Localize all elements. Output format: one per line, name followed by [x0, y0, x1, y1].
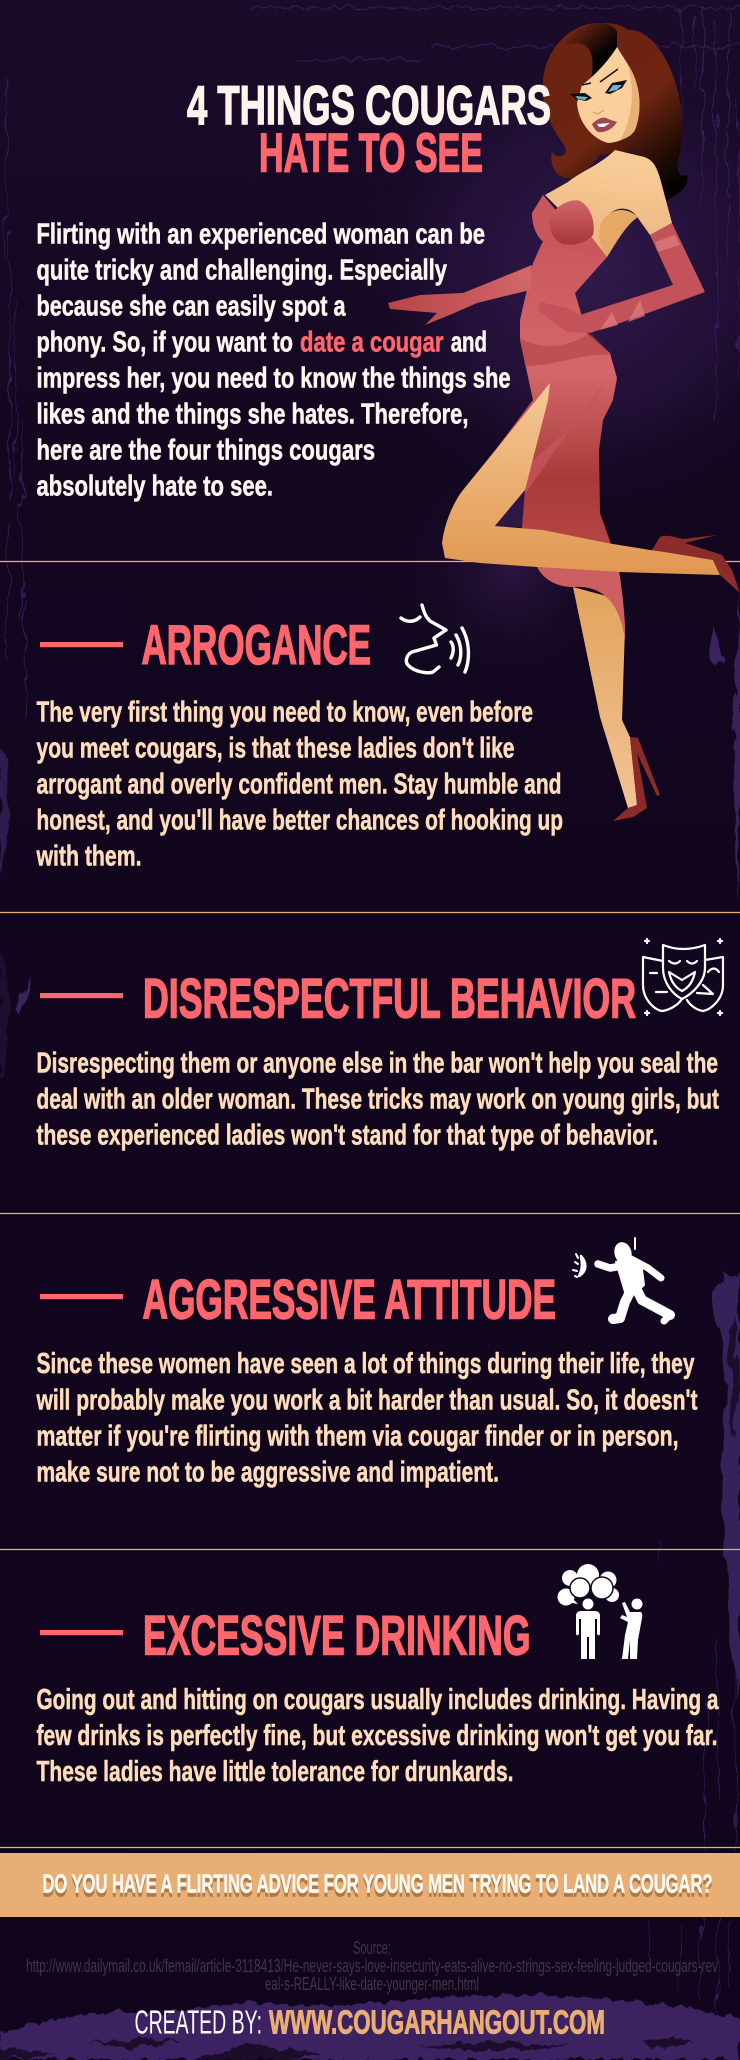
hair	[543, 23, 688, 202]
intro paragraph: date a cougar	[300, 326, 444, 358]
body text	[36, 1684, 719, 1788]
dash	[40, 1630, 123, 1635]
glove folds	[600, 235, 680, 330]
gap between the legs	[495, 490, 525, 527]
body text: The very first thing you need to know, even before	[36, 697, 533, 729]
front leg	[442, 383, 720, 575]
body text: arrogant and overly confident men. Stay humble and	[36, 768, 562, 800]
dress fold shadow	[520, 333, 610, 366]
call-to-action banner	[0, 1853, 740, 1917]
body text: with them.	[36, 840, 142, 872]
source	[26, 1938, 718, 1994]
intro paragraph: quite tricky and challenging. Especially	[36, 254, 447, 286]
body text	[36, 1048, 719, 1152]
title line 1: 4 THINGS COUGARS	[187, 74, 551, 136]
section: disrespectful behavior	[36, 939, 723, 1152]
man right	[632, 1598, 642, 1610]
title	[187, 74, 551, 184]
body text	[36, 697, 563, 872]
front arm glove	[388, 265, 532, 325]
lips	[592, 118, 617, 132]
section: excessive drinking	[36, 1564, 719, 1788]
face shadow	[620, 63, 640, 140]
front shoe	[652, 535, 740, 593]
intro paragraph: absolutely hate to see.	[36, 470, 273, 502]
intro paragraph: and	[451, 326, 487, 358]
bust	[532, 195, 607, 258]
intro paragraph: impress her, you need to know the things she	[36, 362, 510, 394]
body text: make sure not to be aggressive and impatient.	[36, 1456, 499, 1488]
body text	[36, 1348, 698, 1488]
back leg and dress tail	[573, 587, 637, 808]
face	[577, 47, 640, 143]
section dividers	[0, 562, 740, 1848]
dash	[40, 993, 123, 998]
nose	[593, 110, 604, 114]
body text: you meet cougars, is that these ladies don't like	[36, 732, 514, 764]
intro paragraph	[36, 218, 510, 502]
source: eal-s-REALLY-like-date-younger-men.html	[265, 1974, 479, 1994]
intro paragraph: likes and the things she hates. Therefore,	[36, 398, 468, 430]
icon: shouting face	[401, 605, 468, 673]
man left	[582, 1598, 594, 1610]
icon: theatre masks	[643, 939, 723, 1015]
hair dark parting	[565, 23, 617, 85]
back shoe	[613, 737, 660, 821]
icon: aggressive man	[573, 1238, 670, 1321]
title line 2: HATE TO SEE	[259, 122, 483, 184]
section: arrogance	[36, 605, 563, 872]
armpit shade	[599, 210, 638, 257]
body text: These ladies have little tolerance for drunkards.	[36, 1756, 514, 1788]
section: aggressive attitude	[36, 1238, 698, 1488]
intro paragraph: phony. So, if you want to	[36, 326, 293, 358]
eyes	[570, 69, 627, 101]
intro paragraph: here are the four things cougars	[36, 434, 375, 466]
heading: ARROGANCE	[142, 613, 371, 676]
intro paragraph: Flirting with an experienced woman can be	[36, 218, 485, 250]
heading: EXCESSIVE DRINKING	[143, 1604, 530, 1667]
icon: two men with speech bubbles	[558, 1564, 642, 1659]
bust cup	[549, 200, 594, 245]
rear arm glove	[538, 223, 705, 333]
chest and arm skin	[545, 150, 672, 257]
credit line	[134, 2003, 605, 2040]
dress body	[463, 225, 619, 572]
source: Source:	[353, 1938, 391, 1958]
dash	[40, 1294, 123, 1299]
figure: woman in red dress	[388, 23, 740, 821]
credit line: CREATED BY:	[134, 2003, 262, 2040]
intro paragraph: because she can easily spot a	[36, 290, 346, 322]
dash	[40, 642, 123, 647]
